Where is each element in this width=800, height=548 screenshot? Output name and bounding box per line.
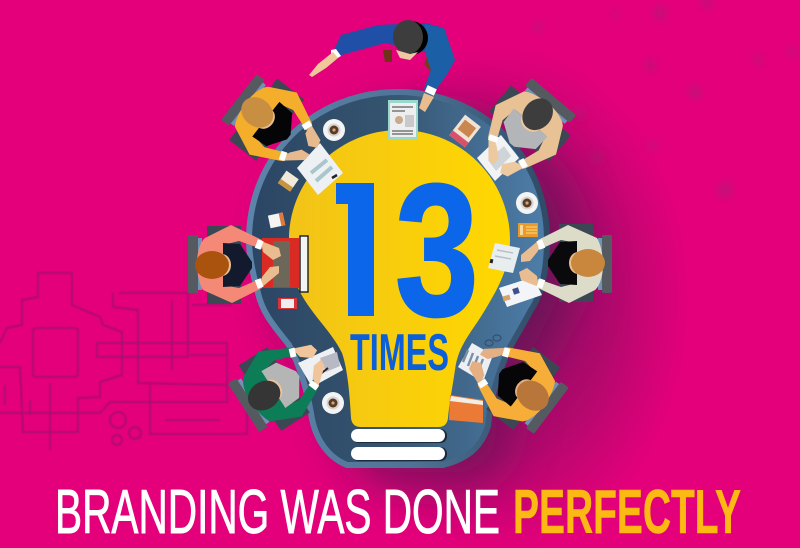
glasses [485, 335, 501, 346]
person: left, pink [188, 225, 281, 304]
person: upper left, yellow [214, 66, 336, 186]
person: lower right, yellow [454, 323, 575, 442]
bar chart sheet [458, 343, 493, 382]
person: lower left, green [222, 324, 343, 441]
small red card [278, 298, 297, 309]
small card left [268, 212, 285, 228]
number 13 [336, 182, 474, 318]
right sheet B [499, 277, 542, 307]
red laptop [262, 236, 308, 292]
striped booklet upper right [449, 115, 481, 147]
word TIMES: TIMES [350, 324, 449, 382]
person: upper right, tan [463, 71, 584, 193]
person: right, pale [519, 224, 612, 303]
top report sheet [388, 100, 418, 140]
light bulb [289, 130, 510, 427]
bulb base bars [351, 429, 447, 461]
top man [309, 20, 455, 112]
sheet upper left [297, 143, 343, 195]
cup upper right [516, 192, 538, 214]
table shadow [276, 109, 581, 488]
cup upper left [323, 119, 345, 141]
number 13: 3 [395, 146, 479, 356]
table [249, 92, 547, 465]
headline: BRANDING WAS DONE [55, 478, 500, 547]
circuit line pattern, lower left [0, 273, 247, 450]
small card upper left [278, 171, 299, 192]
cup lower left [322, 392, 344, 414]
papers and objects on the table [262, 100, 542, 423]
sheet lower left [298, 347, 343, 387]
laptop upper right [477, 135, 519, 181]
broad shadow glow [310, 45, 690, 548]
orange notebook [449, 395, 483, 423]
right sheet A [488, 243, 520, 273]
calculator [518, 223, 538, 237]
number 13: 1 [310, 146, 406, 357]
faint pattern, upper right [533, 0, 797, 198]
